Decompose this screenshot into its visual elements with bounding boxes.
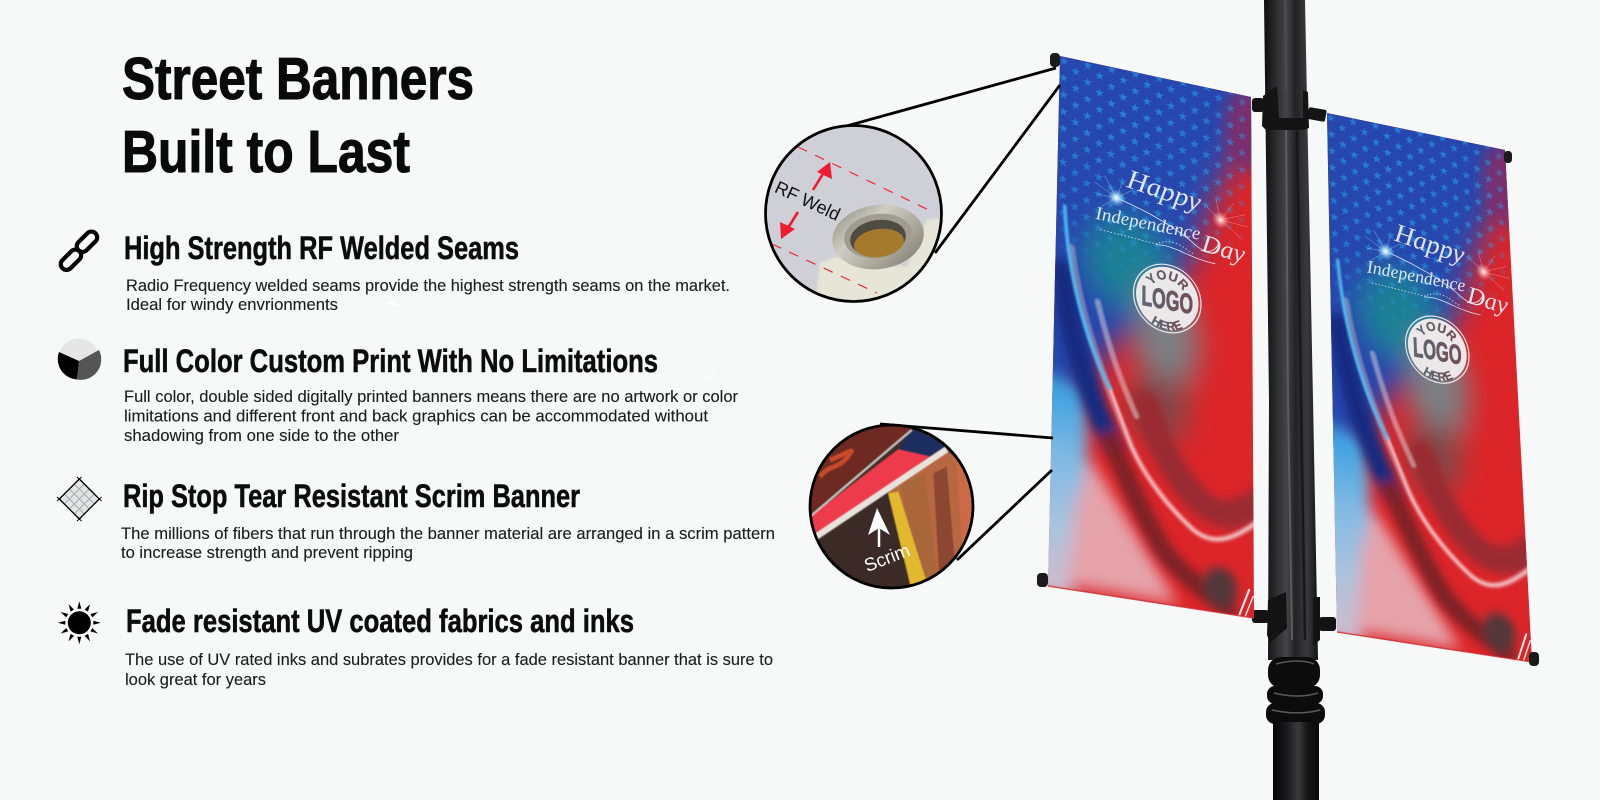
- logo placeholder: LOGO: [1141, 280, 1193, 320]
- weld photo: [767, 126, 940, 300]
- icon: chain link: [58, 229, 100, 272]
- callout ring: [766, 126, 942, 302]
- description: shadowing from one side to the other: [124, 427, 399, 445]
- feature: RF welded seams: [58, 229, 730, 314]
- banner artwork: [1048, 56, 1254, 618]
- pole shaft upper: [1264, 0, 1318, 660]
- banner greeting text: Day: [1465, 281, 1509, 320]
- heading: Full Color Custom Print With No Limitations: [123, 343, 658, 379]
- banner greeting text: [1366, 224, 1508, 316]
- banner hem: [1337, 632, 1532, 662]
- logo placeholder: HERE: [1424, 366, 1454, 382]
- callout leader lines: [843, 68, 1060, 253]
- icon: sun: [58, 601, 101, 644]
- icon: color wheel: [58, 338, 101, 380]
- feature: rip stop scrim: [57, 477, 775, 562]
- feature: full color print: [58, 338, 739, 445]
- banner hem: [1048, 586, 1254, 618]
- bottom collar: [1252, 592, 1336, 645]
- feature: UV fade resistance: [58, 601, 773, 689]
- banner greeting text: [1095, 170, 1246, 266]
- street lamp pole: [1252, 0, 1336, 800]
- banner greeting text: Independence: [1094, 203, 1201, 245]
- top collar: [1252, 86, 1327, 130]
- logo placeholder: [1405, 315, 1470, 384]
- pole shaft lower: [1273, 722, 1319, 800]
- stray white marks: [385, 301, 716, 388]
- logo placeholder: HERE: [1151, 316, 1183, 331]
- callout leader lines: [880, 424, 1053, 560]
- description: The millions of fibers that run through the banner material are arranged in a scrim pattern: [121, 525, 775, 543]
- weld label with arrows: [772, 162, 843, 239]
- callout: RF weld detail: [760, 68, 1060, 310]
- logo placeholder: YOUR: [1145, 270, 1188, 291]
- description: limitations and different front and back graphics can be accommodated without: [124, 408, 708, 426]
- heading: Fade resistant UV coated fabrics and inks: [126, 603, 634, 639]
- banner greeting text: Happy: [1392, 217, 1466, 270]
- logo placeholder: [1132, 264, 1202, 334]
- description: to increase strength and prevent ripping: [121, 544, 413, 562]
- scrim label with arrow: [861, 508, 913, 576]
- heading: High Strength RF Welded Seams: [124, 230, 519, 266]
- description: Radio Frequency welded seams provide the highest strength seams on the market.: [126, 277, 730, 295]
- description: Ideal for windy envrionments: [126, 296, 338, 314]
- description: look great for years: [125, 671, 266, 689]
- scrim label with arrow: Scrim: [861, 539, 913, 576]
- banner: right: [1327, 113, 1539, 666]
- callout ring: [810, 425, 973, 588]
- heading: Rip Stop Tear Resistant Scrim Banner: [123, 478, 580, 514]
- logo placeholder: YOUR: [1416, 322, 1456, 342]
- banner artwork: [1327, 113, 1532, 662]
- description: [126, 277, 730, 314]
- description: Full color, double sided digitally printed banners means there are no artwork or color: [124, 388, 739, 406]
- logo placeholder: LOGO: [1413, 332, 1462, 371]
- banner greeting text: Day: [1200, 228, 1247, 269]
- banner greeting text: Happy: [1124, 164, 1204, 219]
- banner greeting text: Independence: [1366, 256, 1465, 296]
- description: The use of UV rated inks and subrates provides for a fade resistant banner that is sure to: [125, 651, 773, 669]
- description: [124, 388, 739, 445]
- title: Street Banners: [122, 46, 474, 112]
- pole base rings: [1266, 657, 1325, 724]
- icon: scrim mesh diamond: [57, 477, 102, 521]
- scrim photo: [811, 426, 972, 587]
- grommets: [1037, 53, 1060, 587]
- banner: left: [1037, 53, 1254, 619]
- title: Built to Last: [122, 119, 410, 185]
- description: [121, 525, 775, 562]
- callout: scrim detail: [808, 422, 1054, 590]
- weld label with arrows: RF Weld: [772, 177, 843, 225]
- description: [125, 651, 773, 689]
- title: [122, 46, 474, 185]
- grommets: [1504, 151, 1539, 666]
